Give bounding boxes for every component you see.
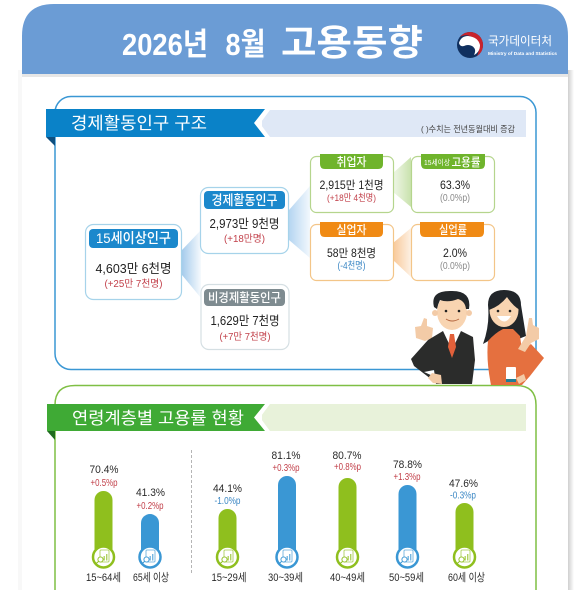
bar: 15~29세: 15~29세 (212, 571, 246, 584)
bar: 65세 이상 (133, 487, 169, 584)
bar: 50~59세: +1.3%p (394, 472, 421, 483)
bar: 40~49세 (330, 450, 365, 584)
bar: 50~59세: 78.8% (393, 459, 422, 471)
box: 실업률: 2.0% (443, 248, 467, 260)
title: 2026년 (122, 27, 208, 62)
box: 실업률: 실업률 (439, 223, 467, 237)
logo: Ministry of Data and Statistics: 국가데이터처 (488, 34, 552, 48)
box: 취업자: 2,915만 1천명 (320, 178, 384, 192)
bar: 50~59세: 50~59세 (389, 571, 424, 584)
bar: 50~59세 (389, 459, 424, 584)
box: 15세이상인구: 15세이상인구 (96, 230, 171, 246)
connectors (182, 157, 411, 298)
heading ribbon: 연령계층별 고용률 현황 (72, 409, 244, 428)
box: 비경제활동인구: 1,629만 7천명 (210, 313, 280, 328)
box: 15세이상인구: 4,603만 6천명 (96, 261, 172, 276)
bar: 15~29세: 44.1% (213, 483, 242, 495)
box: 취업자: (+18만 4천명) (327, 193, 376, 204)
bar: 30~39세: +0.3%p (272, 463, 300, 474)
header banner (22, 4, 568, 77)
bar: 60세 이상: 47.6% (449, 478, 478, 490)
bar: 65세 이상: 41.3% (136, 487, 165, 499)
box: 15세이상 고용률: 63.3% (440, 180, 470, 192)
box: 경제활동인구 (200, 188, 288, 254)
box: 실업자: 실업자 (336, 223, 366, 237)
box: 비경제활동인구: 비경제활동인구 (208, 290, 281, 305)
bar: 40~49세: +0.8%p (334, 462, 361, 473)
bar: 30~39세 (268, 450, 303, 584)
note: ( )수치는 전년동월대비 증감 (421, 124, 515, 134)
box: 실업률: (0.0%p) (440, 261, 470, 272)
box: 실업자 (310, 222, 394, 280)
box: 15세이상 고용률: (0.0%p) (440, 193, 470, 204)
bar: 30~39세: 30~39세 (268, 571, 303, 584)
title: 8월 (226, 27, 266, 62)
box: 비경제활동인구: (+7만 7천명) (220, 331, 270, 343)
bar: 15~64세: +0.5%p (90, 478, 118, 489)
bar: 60세 이상 (448, 478, 485, 584)
woman (483, 290, 544, 385)
bar: 15~64세 (86, 464, 121, 584)
logo: Ministry of Data and Statistics (457, 32, 558, 58)
box: 실업률 (412, 222, 494, 280)
panel: employment rate by age group (47, 386, 536, 590)
box: 15세이상 고용률 (412, 154, 494, 212)
logo: Ministry of Data and Statistics: Ministry of Data and Statistics (488, 51, 558, 56)
bar: 15~29세: -1.0%p (214, 496, 241, 507)
title: 고용동향 (281, 22, 423, 63)
bar: 30~39세: 81.1% (272, 450, 301, 462)
bar: 15~29세 (212, 483, 246, 584)
box: 15세이상인구: (+25만 7천명) (104, 278, 162, 290)
heading ribbon: 경제활동인구 구조 (71, 114, 207, 133)
box: 경제활동인구: (+18만명) (224, 233, 265, 245)
heading ribbon (47, 404, 526, 440)
box: 경제활동인구: 2,973만 9천명 (210, 216, 280, 231)
box: 15세이상인구 (86, 224, 182, 300)
illustration: man and woman giving thumbs up (411, 290, 544, 385)
bar: 40~49세: 80.7% (332, 450, 362, 462)
bar: 15~64세: 15~64세 (86, 571, 121, 584)
box: 비경제활동인구 (201, 284, 289, 350)
title (122, 22, 423, 63)
box: 실업자: 58만 8천명 (327, 246, 376, 260)
man (411, 291, 475, 384)
heading ribbon (46, 109, 526, 146)
box: 취업자 (310, 154, 394, 212)
bar: 15~64세: 70.4% (90, 464, 119, 476)
bar: 65세 이상: +0.2%p (136, 501, 164, 512)
bar: 60세 이상: -0.3%p (450, 490, 476, 502)
bar: 40~49세: 40~49세 (330, 571, 365, 584)
box: 취업자: 취업자 (336, 155, 366, 169)
box: 15세이상 고용률: 15세이상 (424, 157, 450, 167)
bar: 65세 이상: 65세 이상 (133, 571, 169, 584)
box: 15세이상 고용률: 고용률 (452, 156, 481, 169)
box: 실업자: (-4천명) (338, 260, 366, 272)
bar: 60세 이상: 60세 이상 (448, 571, 485, 584)
panel: economically active population structure (46, 96, 536, 370)
box: 경제활동인구: 경제활동인구 (212, 193, 278, 208)
